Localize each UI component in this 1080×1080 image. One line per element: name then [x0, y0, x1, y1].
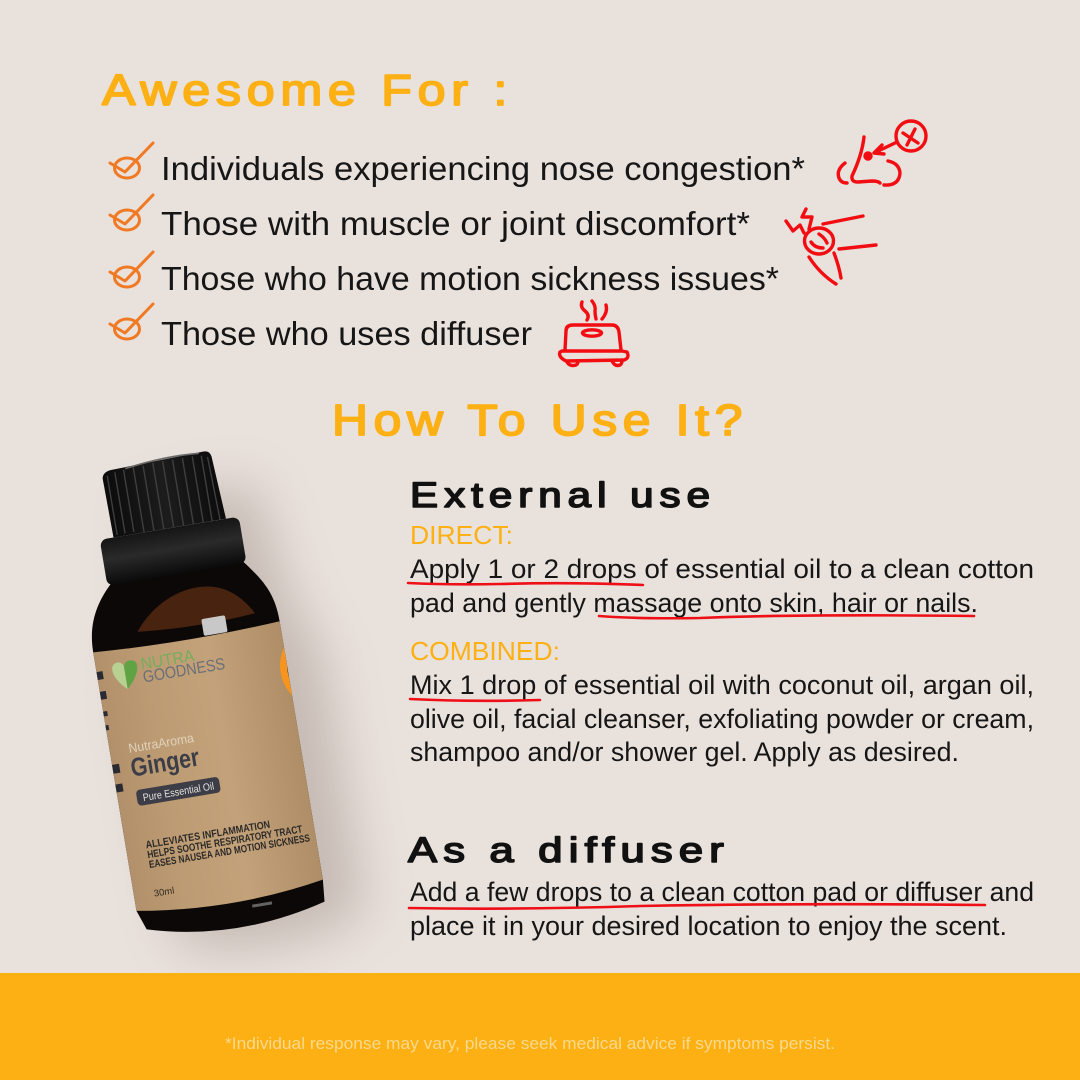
claims: ALLEVIATES INFLAMMATION: [145, 819, 271, 851]
combined instructions: Mix 1 drop of essential oil with coconut oil, argan oil,: [410, 670, 1034, 700]
direct instructions: pad and gently massage onto skin, hair or nails.: [410, 588, 978, 618]
benefit 1: Individuals experiencing nose congestion*: [161, 150, 805, 187]
underline: add drops: [409, 904, 985, 909]
icon: congested nose: [838, 121, 926, 185]
heading: external use: External use: [410, 476, 716, 515]
glass highlight: [201, 615, 228, 636]
heading: as a diffuser: As a diffuser: [408, 831, 730, 870]
underline: massage: [599, 615, 974, 618]
claims: [145, 813, 311, 871]
icon: check mark 4: [110, 304, 153, 339]
icon: sore joint: [786, 209, 876, 284]
diffuser instructions: Add a few drops to a clean cotton pad or diffuser and: [410, 877, 1034, 907]
combined label: COMBINED:: [410, 636, 560, 666]
product bottle: [92, 451, 324, 932]
orange seal: [280, 648, 292, 696]
heading: awesome for: Awesome For :: [102, 66, 513, 115]
combined instructions: [410, 670, 1034, 767]
bottle drop shadow: [106, 478, 368, 960]
combined instructions: shampoo and/or shower gel. Apply as desired.: [410, 737, 959, 767]
claims: EASES NAUSEA AND MOTION SICKNESS: [148, 832, 311, 871]
combined instructions: olive oil, facial cleanser, exfoliating powder or cream,: [410, 704, 1034, 734]
footer band: [0, 973, 1080, 1080]
direct instructions: [410, 554, 1034, 618]
benefit 3: Those who have motion sickness issues*: [161, 260, 779, 297]
benefits list: [110, 143, 805, 352]
icon: check mark 1: [110, 143, 153, 178]
diffuser instructions: [410, 877, 1034, 941]
icon: diffuser: [560, 301, 628, 366]
base glint: [252, 901, 272, 908]
claims: HELPS SOOTHE RESPIRATORY TRACT: [146, 823, 304, 861]
heading: how to use it: How To Use It?: [332, 396, 748, 445]
cap collar: [100, 517, 247, 586]
logo: NUTRA: [139, 647, 196, 674]
underline: mix drop: [410, 699, 540, 701]
product name: Ginger: [128, 742, 201, 783]
glass body: [82, 556, 328, 944]
benefit 4: Those who uses diffuser: [161, 315, 532, 352]
direct instructions: Apply 1 or 2 drops of essential oil to a clean cotton: [410, 554, 1034, 584]
direct label: DIRECT:: [410, 520, 513, 550]
logo: [111, 642, 226, 691]
barcode marks: [97, 671, 124, 792]
cap: [101, 450, 226, 538]
pill tag: Pure Essential Oil: [142, 780, 215, 804]
product line name: NutraAroma: [127, 730, 196, 756]
icon: check mark 2: [110, 195, 153, 230]
volume: 30ml: [153, 885, 175, 900]
icon: check mark 3: [110, 252, 153, 287]
kraft label: [93, 621, 323, 911]
footer disclaimer: *Individual response may vary, please seek medical advice if symptoms persist.: [225, 1034, 835, 1053]
logo heart: [111, 659, 141, 691]
diffuser instructions: place it in your desired location to enjoy the scent.: [410, 911, 1007, 941]
amber glass window: [132, 579, 255, 635]
logo: GOODNESS: [142, 655, 226, 686]
benefit 2: [110, 195, 750, 242]
benefit 2: Those with muscle or joint discomfort*: [161, 205, 750, 242]
benefit 4: [110, 304, 532, 352]
underline: apply drops: [408, 583, 643, 585]
